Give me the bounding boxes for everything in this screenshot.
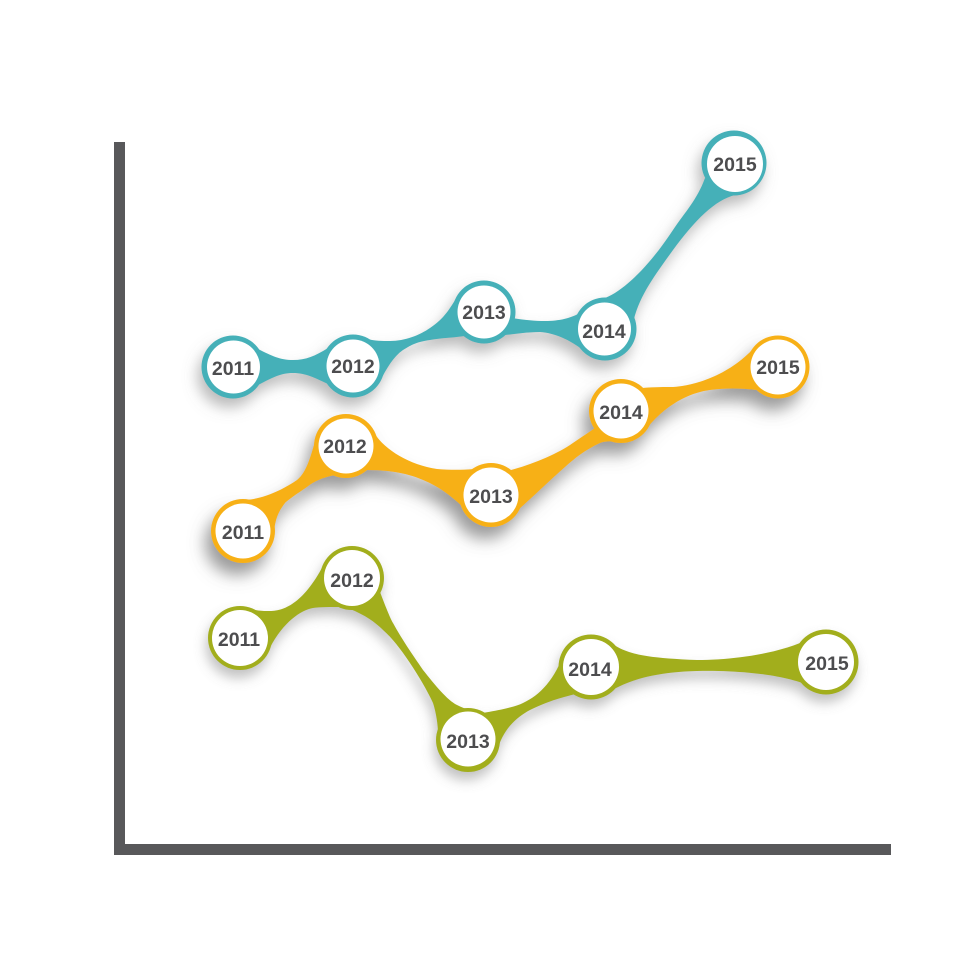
node: teal 2012 bbox=[326, 340, 380, 392]
teal line series bbox=[202, 130, 766, 398]
green connectors bbox=[208, 546, 858, 772]
node: green 2012 bbox=[324, 550, 380, 606]
node: yellow 2015: 2015 bbox=[756, 357, 800, 379]
node: green 2013: 2013 bbox=[446, 731, 490, 753]
chart axes bbox=[114, 142, 891, 855]
node: yellow 2013 bbox=[464, 468, 518, 522]
node: teal 2014: 2014 bbox=[582, 321, 626, 343]
node: yellow 2012 bbox=[318, 418, 374, 474]
node: green 2011: 2011 bbox=[218, 629, 260, 651]
teal connectors bbox=[202, 130, 766, 398]
green line series bbox=[208, 546, 858, 772]
node: yellow 2011: 2011 bbox=[222, 522, 264, 544]
node: teal 2012: 2012 bbox=[331, 356, 375, 378]
node: teal 2015: 2015 bbox=[713, 154, 757, 176]
node: yellow 2011 bbox=[216, 504, 270, 558]
node: teal 2011: 2011 bbox=[212, 358, 254, 380]
node: teal 2013: 2013 bbox=[462, 302, 506, 324]
node: teal 2013 bbox=[458, 286, 510, 338]
yellow line series bbox=[211, 336, 810, 563]
node: green 2015 bbox=[798, 634, 854, 690]
node: teal 2015 bbox=[707, 136, 763, 192]
node: green 2014: 2014 bbox=[568, 659, 612, 681]
node: yellow 2014 bbox=[594, 384, 648, 438]
node: yellow 2013: 2013 bbox=[469, 486, 513, 508]
node: teal 2011 bbox=[207, 340, 260, 394]
node: green 2014 bbox=[563, 639, 619, 695]
node: yellow 2014: 2014 bbox=[599, 402, 643, 424]
node: green 2015: 2015 bbox=[805, 653, 849, 675]
yellow connectors bbox=[211, 336, 810, 563]
node: green 2011 bbox=[212, 610, 268, 666]
node: green 2012: 2012 bbox=[330, 570, 374, 592]
node: yellow 2012: 2012 bbox=[323, 436, 367, 458]
node: yellow 2015 bbox=[750, 340, 806, 394]
node: teal 2014 bbox=[578, 302, 631, 356]
node: green 2013 bbox=[440, 712, 496, 766]
